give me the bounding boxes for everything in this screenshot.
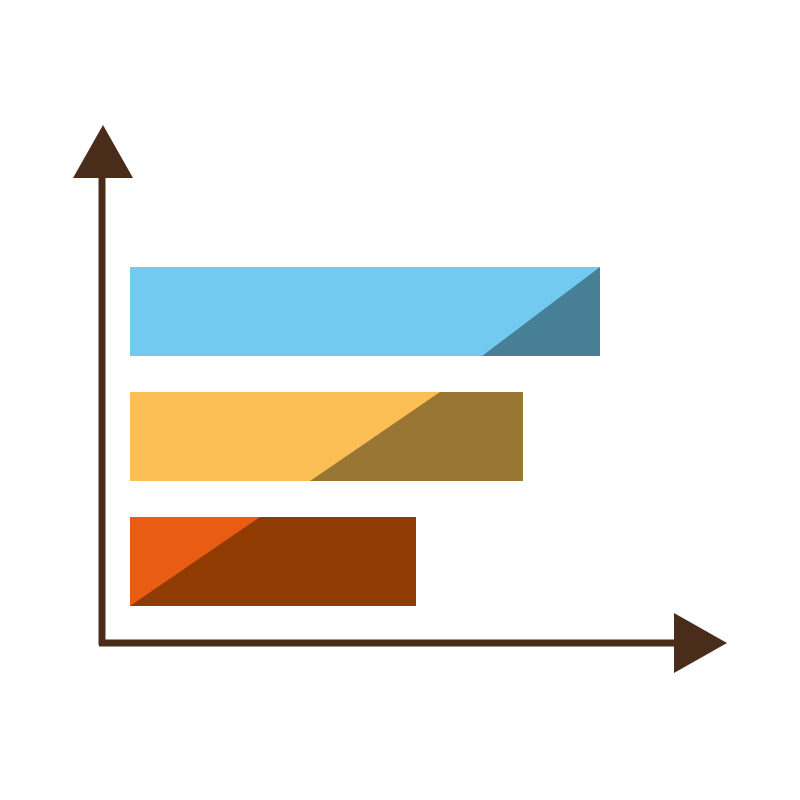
bar: yellow	[130, 392, 523, 481]
axes	[73, 125, 727, 673]
bar: blue	[130, 267, 600, 356]
arrow: right	[674, 613, 727, 673]
arrow: up	[73, 125, 133, 178]
bar: orange	[130, 517, 416, 606]
